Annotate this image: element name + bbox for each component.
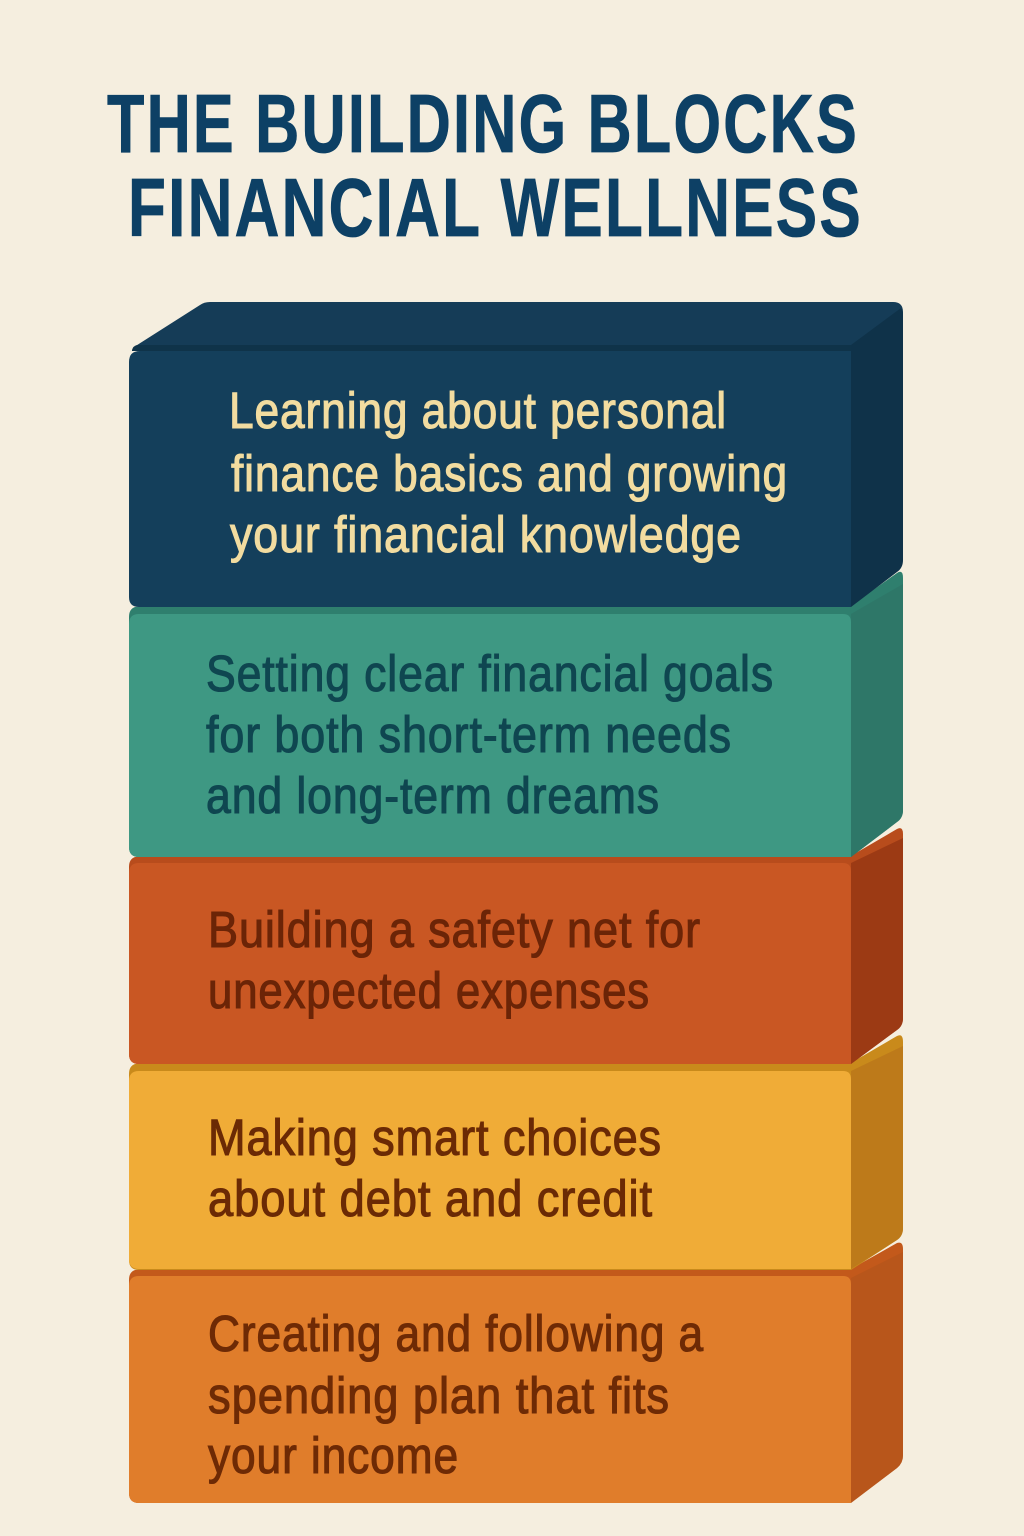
block 3 front face: [129, 863, 851, 1064]
block 4 side and top edge: [129, 1035, 903, 1270]
block 3 side and top edge: [129, 828, 903, 1064]
block 3: safety net: [129, 828, 903, 1064]
block 1 text: [229, 382, 788, 563]
block 4 text: [208, 1109, 662, 1227]
block 1 top face: [134, 302, 903, 347]
block 3 text: Building a safety net for: [208, 901, 701, 958]
block 4: debt and credit: [129, 1035, 903, 1270]
block 2 text: for both short-term needs: [206, 706, 732, 763]
block 1 front face: [129, 351, 851, 607]
block 2: financial goals: [129, 572, 903, 857]
block 5 front face: [129, 1276, 851, 1503]
block 5 text: spending plan that fits: [208, 1367, 670, 1424]
block 1 text: your financial knowledge: [230, 506, 742, 563]
block 2 text: Setting clear financial goals: [206, 645, 774, 702]
block 3 text: [208, 901, 701, 1019]
block 1 side face: [851, 308, 903, 607]
block 2 text: [206, 645, 774, 824]
block 5: spending plan: [129, 1243, 903, 1503]
block 2 front face: [129, 614, 851, 857]
title: [107, 77, 863, 254]
block 5 text: [208, 1305, 704, 1484]
block 1: financial knowledge: [129, 302, 903, 607]
block 4 text: about debt and credit: [208, 1170, 653, 1227]
block 5 text: your income: [208, 1427, 459, 1484]
block 4 front face: [129, 1071, 851, 1269]
block 5 side and top edge: [129, 1243, 903, 1503]
block 3 text: unexpected expenses: [208, 962, 650, 1019]
block 1 top shadow edge: [132, 345, 851, 351]
block 1 text: finance basics and growing: [231, 445, 788, 502]
block 2 side and top edge: [129, 572, 903, 857]
block 2 text: and long-term dreams: [206, 767, 660, 824]
block 4 text: Making smart choices: [208, 1109, 662, 1166]
block 1 text: Learning about personal: [229, 382, 727, 439]
block 5 text: Creating and following a: [208, 1305, 704, 1362]
